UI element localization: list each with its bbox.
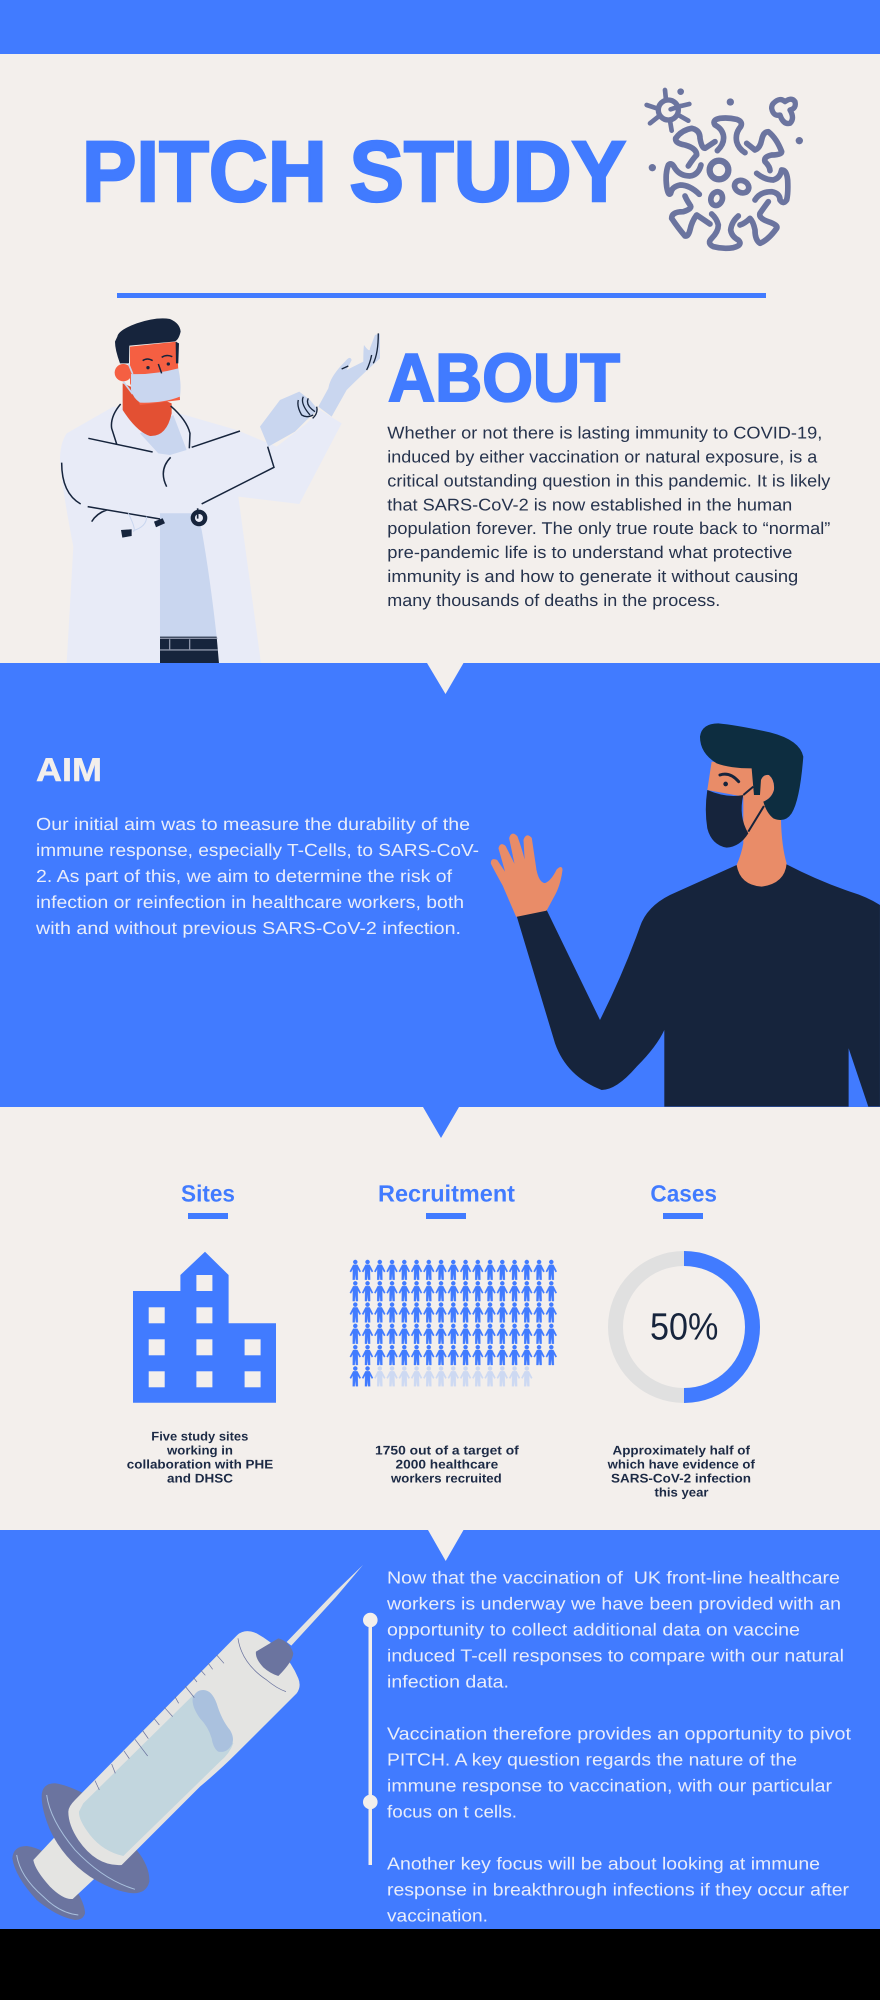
notch: aim to stats	[423, 1107, 459, 1138]
text block: vaccination: Vaccination therefore provides an opportunity to pivot	[387, 1723, 851, 1743]
text block: vaccination	[386, 1567, 851, 1925]
notch: stats to vaccination	[428, 1530, 464, 1561]
text block: aim: infection or reinfection in healthcare workers, both	[36, 892, 464, 912]
panel: vaccination background	[0, 1530, 880, 1929]
illustration: syringe	[12, 1565, 363, 1920]
chart: 50 percent donut	[616, 1258, 752, 1396]
underline: cases	[663, 1213, 703, 1219]
icon: virus	[647, 88, 803, 248]
caption: recruitment: workers recruited	[390, 1472, 502, 1486]
text block: aim: immune response, especially T-Cells, to SARS-CoV-	[36, 840, 479, 860]
caption: cases: Approximately half of	[612, 1444, 751, 1458]
text block: vaccination: focus on t cells.	[387, 1801, 517, 1821]
text block: vaccination: vaccination.	[387, 1905, 488, 1925]
heading: sites: Sites	[181, 1180, 235, 1206]
caption: sites: working in	[166, 1444, 233, 1458]
text block: vaccination: response in breakthrough infections if they occur after	[387, 1879, 849, 1899]
bottom black band	[0, 1929, 880, 2000]
heading: aim: AIM	[36, 751, 102, 788]
text block: about: that SARS-CoV-2 is now established in the human	[387, 495, 792, 514]
title: PITCH STUDY	[82, 124, 626, 220]
icon: building	[133, 1252, 276, 1403]
text block: vaccination: PITCH. A key question regards the nature of the	[387, 1749, 797, 1769]
panel: cases	[607, 1180, 756, 1500]
underline: recruitment	[426, 1213, 466, 1219]
caption: recruitment	[375, 1444, 520, 1486]
heading: recruitment: Recruitment	[378, 1180, 515, 1206]
caption: sites: collaboration with PHE	[127, 1458, 273, 1472]
top banner	[0, 0, 880, 54]
text block: vaccination: Now that the vaccination of UK front-line healthcare	[387, 1567, 840, 1587]
pictogram: 1750 of 2000 workers	[350, 1260, 557, 1386]
text block: about: Whether or not there is lasting immunity to COVID-19,	[387, 424, 822, 443]
text block: aim: with and without previous SARS-CoV-2 infection.	[35, 918, 461, 938]
text block: about: pre-pandemic life is to understand what protective	[387, 543, 792, 562]
text block: aim: Our initial aim was to measure the durability of the	[36, 814, 470, 834]
text block: aim: 2. As part of this, we aim to determine the risk of	[36, 866, 452, 886]
timeline	[363, 1613, 378, 1865]
divider line under title	[117, 293, 766, 298]
text block: about: many thousands of deaths in the process.	[387, 591, 720, 610]
underline: sites	[188, 1213, 228, 1219]
illustration: masked man waving	[492, 723, 880, 1107]
caption: recruitment: 1750 out of a target of	[375, 1444, 520, 1458]
text block: about: induced by either vaccination or natural exposure, is a	[387, 448, 818, 467]
text block: about: population forever. The only true route back to “normal”	[387, 519, 831, 538]
caption: sites: and DHSC	[167, 1472, 233, 1486]
text block: about: critical outstanding question in this pandemic. It is likely	[387, 472, 831, 490]
text block: vaccination: induced T-cell responses to compare with our natural	[387, 1645, 844, 1665]
illustration: doctor	[60, 318, 380, 663]
panel: recruitment	[350, 1180, 557, 1486]
caption: sites	[127, 1430, 273, 1486]
panel: sites	[127, 1180, 276, 1486]
panel: aim background	[0, 663, 880, 1107]
text block: vaccination: immune response to vaccination, with our particular	[387, 1775, 832, 1795]
text block: vaccination: infection data.	[387, 1671, 509, 1691]
chart: 50 percent donut: 50%	[650, 1306, 718, 1348]
text block: about: immunity is and how to generate it without causing	[387, 567, 798, 586]
caption: cases	[607, 1444, 756, 1500]
text block: vaccination: workers is underway we have been provided with an	[386, 1593, 841, 1613]
heading: cases: Cases	[650, 1180, 717, 1206]
notch: about to aim	[427, 663, 464, 694]
text block: vaccination: Another key focus will be about looking at immune	[387, 1853, 820, 1873]
caption: sites: Five study sites	[151, 1430, 248, 1444]
caption: recruitment: 2000 healthcare	[396, 1458, 498, 1472]
caption: cases: SARS-CoV-2 infection	[611, 1472, 751, 1486]
text block: aim	[35, 814, 479, 938]
caption: cases: which have evidence of	[607, 1458, 756, 1472]
text block: vaccination: opportunity to collect additional data on vaccine	[387, 1619, 800, 1639]
heading: about: ABOUT	[388, 340, 620, 416]
caption: cases: this year	[654, 1486, 709, 1500]
text block: about	[387, 424, 831, 610]
